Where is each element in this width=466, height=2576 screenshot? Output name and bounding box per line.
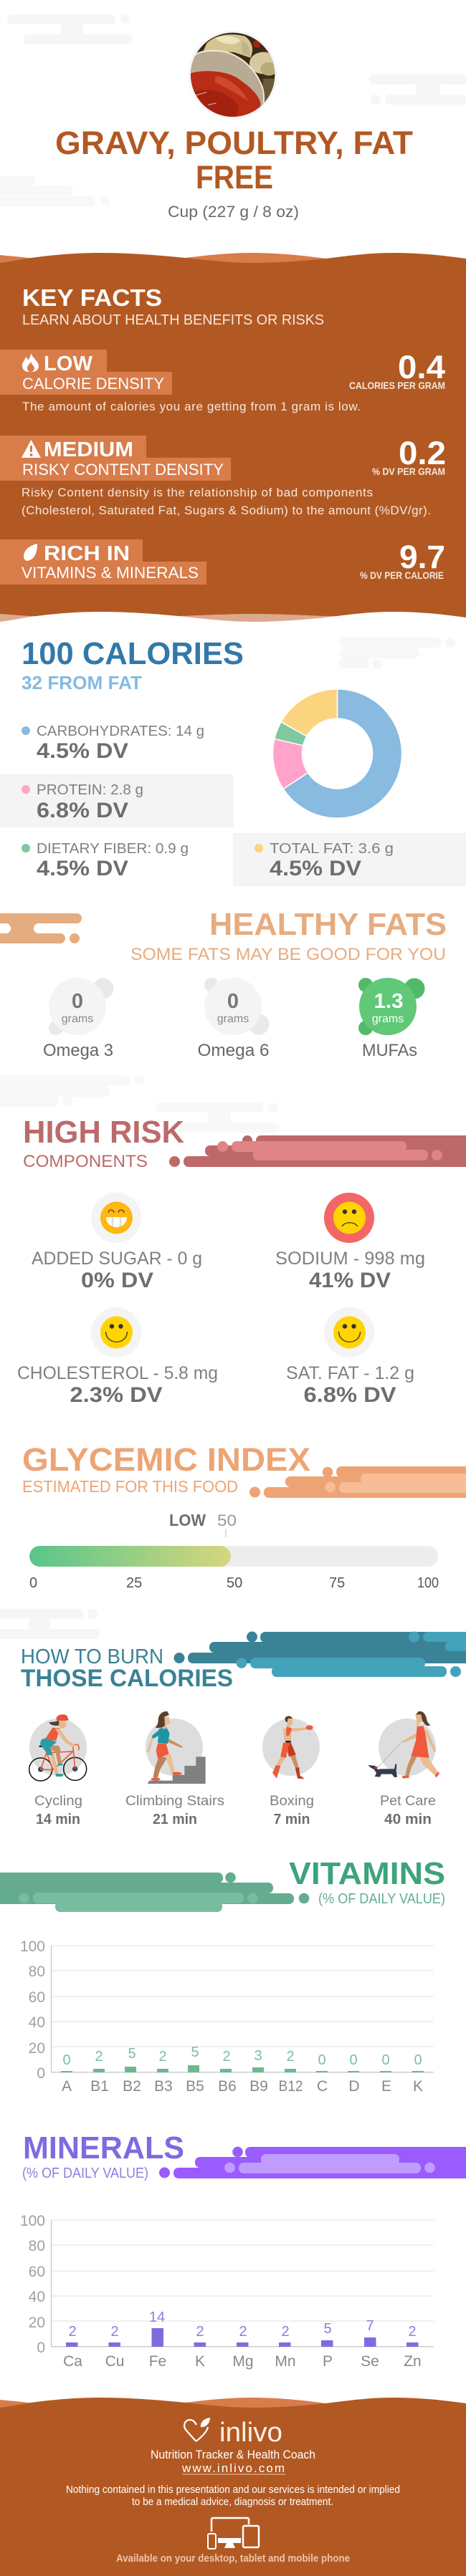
vitamins bar chart: 60 xyxy=(29,1989,45,2006)
serving size: Cup (227 g / 8 oz) xyxy=(168,203,299,221)
activity: boxing: 7 min xyxy=(274,1812,310,1827)
minerals bar chart: 2 xyxy=(196,2324,204,2340)
panel: vitamins xyxy=(0,1856,445,2095)
minerals bar chart: 0 xyxy=(37,2340,45,2356)
glycemic index heading xyxy=(22,1441,310,1496)
website link: www.inlivo.com xyxy=(181,2461,285,2475)
calories heading xyxy=(22,636,244,693)
legend: protein xyxy=(0,774,234,827)
fact: low calorie density: 0.4 xyxy=(398,349,445,385)
decorative cloud xyxy=(159,2147,466,2178)
vitamins bar chart: B12 xyxy=(278,2078,303,2095)
activity: climbing stairs xyxy=(125,1711,224,1827)
activity: cycling: Cycling xyxy=(34,1794,82,1809)
vitamins bar chart: 0 xyxy=(318,2052,326,2068)
minerals bar chart: 5 xyxy=(323,2321,332,2337)
burn heading xyxy=(21,1645,233,1692)
omega 6 xyxy=(198,978,270,1060)
gauge marker: 50 xyxy=(217,1512,237,1529)
icon: grinning face xyxy=(100,1202,133,1234)
gauge marker: LOW xyxy=(169,1511,206,1529)
gauge axis: 25 xyxy=(126,1575,142,1591)
MUFAs xyxy=(358,978,424,1060)
healthy fats heading: HEALTHY FATS xyxy=(209,907,447,942)
glycemic index heading: GLYCEMIC INDEX xyxy=(22,1441,310,1478)
sodium: 41% DV xyxy=(309,1269,391,1292)
omega 6: 0 xyxy=(227,990,239,1013)
food photo xyxy=(189,30,277,119)
icon: smiling face xyxy=(100,1317,133,1348)
logo: inlivo xyxy=(219,2418,282,2448)
vitamins bar chart: B1 xyxy=(90,2078,109,2095)
minerals bar chart: Mg xyxy=(232,2353,254,2370)
minerals bar chart: 14 xyxy=(149,2310,165,2325)
vitamins bar chart: B2 xyxy=(123,2078,141,2095)
disclaimer: to be a medical advice, diagnosis or treatment. xyxy=(132,2496,333,2508)
vitamins heading: (% OF DAILY VALUE) xyxy=(318,1891,445,1907)
icon: smiling face xyxy=(333,1317,366,1348)
panel: high risk xyxy=(0,1075,466,1407)
icon: sad face xyxy=(333,1202,366,1234)
legend: dietary fiber xyxy=(22,841,189,880)
panel: glycemic index xyxy=(22,1441,466,1591)
vitamins bar chart: 100 xyxy=(20,1938,45,1955)
minerals heading xyxy=(22,2130,184,2181)
header xyxy=(0,14,466,221)
omega 3: grams xyxy=(62,1013,93,1025)
icon: flame xyxy=(22,353,39,372)
fact: medium risky content density: (Cholesterol, Saturated Fat, Sugars & Sodium) to the amount (%DV/gr). xyxy=(22,504,431,517)
healthy fats heading xyxy=(130,907,447,964)
vitamins bar chart: 0 xyxy=(62,2052,71,2068)
vitamins bar chart: 80 xyxy=(29,1964,45,1980)
logo xyxy=(184,2418,282,2448)
decorative cloud xyxy=(249,1466,466,1498)
minerals bar chart: Cu xyxy=(105,2353,124,2370)
fact: low calorie density: LOW xyxy=(44,352,93,375)
minerals bar chart: 2 xyxy=(281,2324,290,2340)
healthy fats heading: SOME FATS MAY BE GOOD FOR YOU xyxy=(130,945,446,964)
minerals bar chart: K xyxy=(195,2353,205,2370)
minerals bar chart: 40 xyxy=(29,2289,45,2305)
icon: boxer xyxy=(272,1716,313,1779)
vitamins bar chart: 2 xyxy=(158,2049,167,2065)
legend: total fat xyxy=(233,833,466,886)
omega 3: Omega 3 xyxy=(43,1041,113,1060)
omega 6: grams xyxy=(217,1013,249,1025)
legend: protein: 6.8% DV xyxy=(37,799,128,822)
vitamins bar chart: E xyxy=(381,2078,391,2095)
minerals bar chart: Ca xyxy=(63,2353,82,2370)
minerals bar chart: Zn xyxy=(404,2353,422,2370)
fact: medium risky content density xyxy=(0,435,446,517)
activity: boxing: Boxing xyxy=(270,1794,314,1809)
burn heading: THOSE CALORIES xyxy=(21,1665,233,1692)
minerals bar chart: 2 xyxy=(408,2324,417,2340)
vitamins bar chart: 5 xyxy=(191,2044,199,2060)
fact: medium risky content density: Risky Content density is the relationship of bad components xyxy=(22,486,373,499)
minerals bar chart: 80 xyxy=(29,2238,45,2254)
fact: medium risky content density: RISKY CONTENT DENSITY xyxy=(22,461,224,479)
sodium xyxy=(275,1193,425,1292)
panel: key facts xyxy=(0,253,466,638)
minerals bar chart: P xyxy=(323,2353,333,2370)
omega 3: 0 xyxy=(72,990,83,1013)
omega 3 xyxy=(43,978,113,1060)
minerals bar chart: Fe xyxy=(149,2353,166,2370)
minerals bar chart: 2 xyxy=(110,2324,119,2340)
added sugar: 0% DV xyxy=(81,1269,153,1292)
decorative cloud xyxy=(173,1632,466,1677)
legend: protein: PROTEIN: 2.8 g xyxy=(37,782,143,798)
cholesterol: 2.3% DV xyxy=(70,1383,162,1407)
vitamins bar chart: 2 xyxy=(286,2049,295,2065)
high risk heading xyxy=(23,1115,184,1171)
fact: rich in vitamins and minerals: % DV PER CALORIE xyxy=(360,569,444,581)
activity: pet care xyxy=(368,1711,439,1827)
vitamins bar chart: B9 xyxy=(249,2078,268,2095)
vitamins bar chart: 0 xyxy=(37,2065,45,2082)
fact: rich in vitamins and minerals xyxy=(0,539,445,585)
activity: pet care: Pet Care xyxy=(380,1794,436,1809)
panel: healthy fats xyxy=(0,907,447,1060)
saturated fat xyxy=(286,1307,414,1407)
vitamins bar chart: C xyxy=(317,2078,328,2095)
added sugar: ADDED SUGAR - 0 g xyxy=(32,1249,202,1269)
fact: low calorie density xyxy=(0,349,445,413)
icon: devices xyxy=(208,2518,259,2549)
legend: dietary fiber: DIETARY FIBER: 0.9 g xyxy=(37,841,189,857)
title: FREE xyxy=(196,159,273,196)
vitamins bar chart: 0 xyxy=(349,2052,358,2068)
legend: dietary fiber: 4.5% DV xyxy=(37,857,128,880)
high risk heading: COMPONENTS xyxy=(23,1152,148,1171)
fact: low calorie density: CALORIES PER GRAM xyxy=(349,380,445,391)
fact: rich in vitamins and minerals: 9.7 xyxy=(399,539,445,575)
icon: woman walking dog xyxy=(368,1711,439,1779)
gauge marker xyxy=(169,1511,237,1537)
disclaimer: Nothing contained in this presentation and our services is intended or implied xyxy=(66,2484,400,2496)
decorative cloud xyxy=(0,1873,309,1912)
minerals bar chart: 100 xyxy=(20,2213,45,2229)
cholesterol xyxy=(17,1307,218,1407)
MUFAs: MUFAs xyxy=(362,1041,417,1060)
vitamins bar chart: 0 xyxy=(381,2052,390,2068)
legend: carbohydrates xyxy=(22,724,204,763)
omega 6: Omega 6 xyxy=(198,1041,270,1060)
vitamins heading xyxy=(289,1856,445,1907)
minerals bar chart: 20 xyxy=(29,2315,45,2331)
footer xyxy=(0,2398,466,2576)
vitamins bar chart: 5 xyxy=(128,2046,136,2062)
saturated fat: 6.8% DV xyxy=(304,1383,396,1407)
availability note: Available on your desktop, tablet and mobile phone xyxy=(116,2552,350,2565)
key facts heading xyxy=(22,284,324,328)
gauge axis xyxy=(29,1575,439,1591)
vitamins bar chart: 2 xyxy=(222,2049,231,2065)
glycemic index heading: ESTIMATED FOR THIS FOOD xyxy=(22,1477,238,1496)
icon: cyclist xyxy=(29,1714,87,1781)
gauge axis: 0 xyxy=(29,1575,37,1591)
vitamins bar chart xyxy=(20,1938,434,2095)
key facts heading: KEY FACTS xyxy=(22,284,162,311)
minerals bar chart: 2 xyxy=(239,2324,247,2340)
activity: cycling xyxy=(29,1714,87,1827)
panel: calories xyxy=(0,636,466,886)
vitamins heading: VITAMINS xyxy=(289,1856,445,1891)
vitamins bar chart: 2 xyxy=(95,2049,103,2065)
cholesterol: CHOLESTEROL - 5.8 mg xyxy=(17,1363,218,1383)
minerals bar chart: Se xyxy=(361,2353,379,2370)
minerals bar chart: 7 xyxy=(366,2318,374,2334)
fact: rich in vitamins and minerals: VITAMINS & MINERALS xyxy=(22,564,199,582)
icon: woman on stairs xyxy=(146,1711,206,1784)
calories heading: 100 CALORIES xyxy=(22,636,244,671)
vitamins bar chart: B5 xyxy=(186,2078,204,2095)
legend: total fat: TOTAL FAT: 3.6 g xyxy=(270,841,394,857)
minerals bar chart xyxy=(20,2213,434,2370)
gauge axis: 100 xyxy=(417,1575,439,1591)
donut chart xyxy=(272,689,401,818)
icon: warning triangle xyxy=(22,440,41,458)
MUFAs: grams xyxy=(372,1013,404,1025)
tagline: Nutrition Tracker & Health Coach xyxy=(151,2448,315,2461)
vitamins bar chart: 40 xyxy=(29,2014,45,2031)
fact: medium risky content density: MEDIUM xyxy=(44,438,133,461)
vitamins bar chart: K xyxy=(413,2078,423,2095)
legend: carbohydrates: CARBOHYDRATES: 14 g xyxy=(37,724,204,739)
vitamins bar chart: A xyxy=(62,2078,72,2095)
activity: climbing stairs: 21 min xyxy=(153,1812,197,1827)
vitamins bar chart: 0 xyxy=(414,2052,422,2068)
MUFAs: 1.3 xyxy=(374,990,403,1013)
gauge axis: 75 xyxy=(329,1575,345,1591)
icon: leaf xyxy=(24,544,37,561)
title xyxy=(55,125,413,196)
title: GRAVY, POULTRY, FAT xyxy=(55,125,413,161)
burn heading: HOW TO BURN xyxy=(21,1645,163,1668)
gauge axis: 50 xyxy=(227,1575,242,1591)
saturated fat: SAT. FAT - 1.2 g xyxy=(286,1363,414,1383)
fact: medium risky content density: 0.2 xyxy=(399,435,446,471)
vitamins bar chart: B3 xyxy=(154,2078,173,2095)
sodium: SODIUM - 998 mg xyxy=(275,1249,425,1269)
panel: minerals xyxy=(20,2130,466,2370)
fact: rich in vitamins and minerals: RICH IN xyxy=(44,542,130,565)
legend: carbohydrates: 4.5% DV xyxy=(37,739,128,763)
minerals bar chart: Mn xyxy=(275,2353,296,2370)
activity: cycling: 14 min xyxy=(36,1812,80,1827)
decorative cloud xyxy=(0,913,82,943)
panel: how to burn calories xyxy=(0,1609,466,1827)
legend: total fat: 4.5% DV xyxy=(270,857,361,880)
minerals bar chart: 60 xyxy=(29,2264,45,2280)
activity: boxing xyxy=(262,1716,320,1827)
fact: low calorie density: CALORIE DENSITY xyxy=(22,375,164,393)
vitamins bar chart: D xyxy=(348,2078,360,2095)
vitamins bar chart: 3 xyxy=(254,2048,262,2064)
minerals bar chart: 2 xyxy=(68,2324,77,2340)
calories heading: 32 FROM FAT xyxy=(22,672,142,693)
activity: climbing stairs: Climbing Stairs xyxy=(125,1794,224,1809)
activity: pet care: 40 min xyxy=(384,1812,432,1827)
vitamins bar chart: 20 xyxy=(29,2040,45,2057)
minerals heading: (% OF DAILY VALUE) xyxy=(22,2166,148,2181)
vitamins bar chart: B6 xyxy=(218,2078,237,2095)
added sugar xyxy=(32,1193,202,1292)
minerals heading: MINERALS xyxy=(23,2130,184,2166)
gauge bar xyxy=(29,1546,438,1567)
high risk heading: HIGH RISK xyxy=(23,1115,184,1150)
fact: medium risky content density: % DV PER GRAM xyxy=(372,466,445,477)
decorative cloud xyxy=(169,1135,466,1167)
fact: low calorie density: The amount of calories you are getting from 1 gram is low. xyxy=(22,400,361,413)
disclaimer xyxy=(66,2484,400,2508)
key facts heading: LEARN ABOUT HEALTH BENEFITS OR RISKS xyxy=(22,312,324,328)
